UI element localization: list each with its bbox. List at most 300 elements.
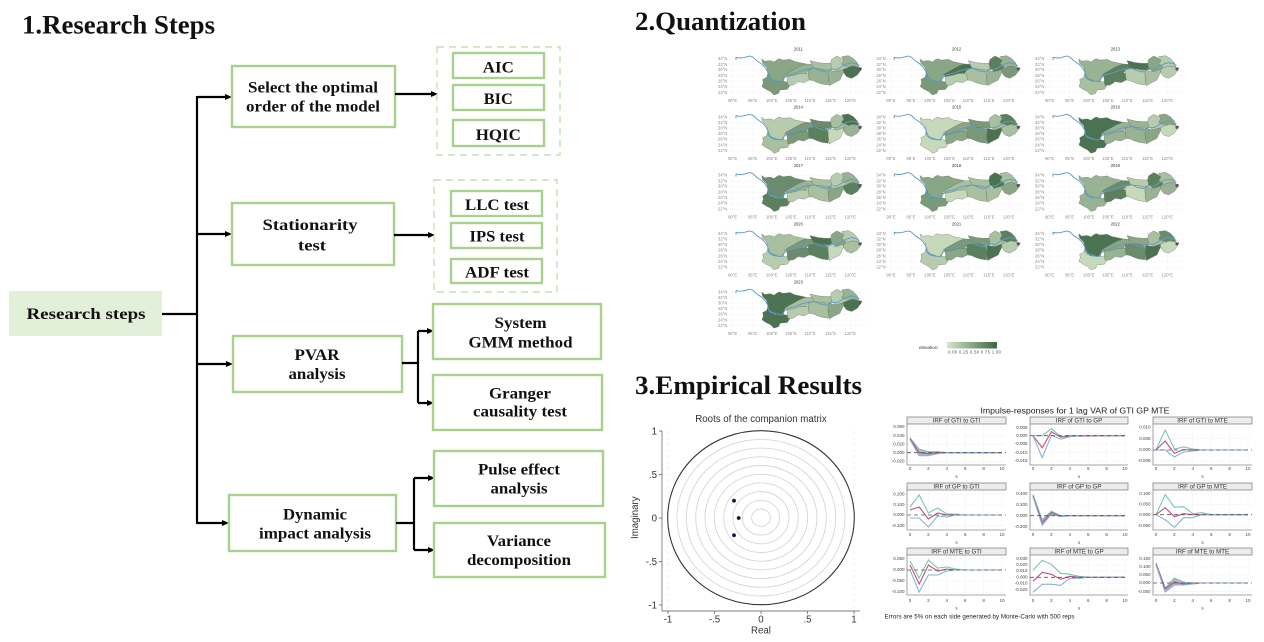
panel: IRF of GTI to MTE: 6 [1210,466,1213,471]
map panel: 2019: 115°E [1142,214,1153,219]
map panel: 2013: 115°E [1142,98,1153,103]
map panel: 2014: 30°N [718,125,727,130]
map panel: 2016: 22°N [1035,148,1044,153]
map panel: 2021: 34°N [876,231,886,236]
panel: IRF of GTI to GTI: 10 [999,466,1005,471]
panel: IRF of GP to MTE: IRF of GP to MTE [1178,483,1227,490]
panel: IRF of GP to MTE: 8 [1228,532,1231,537]
map panel: 2019: 30°N [1035,184,1044,189]
map panel: 2016: 28°N [1035,131,1044,136]
panel: IRF of MTE to GP: -0.010 [1015,581,1028,586]
map panel: 2022: 24°N [1035,259,1044,264]
map panel: 2022: 2022 [1111,221,1121,226]
box: System GMM method: GMM method [468,334,573,351]
panel: IRF of GP to MTE: 0.100 [1139,491,1151,496]
panel: IRF of MTE to GP: -0.020 [1015,587,1028,592]
map panel: 2019: 28°N [1035,189,1044,194]
map panel: 2012: 24°N [876,84,886,89]
map panel: 2015: 100°E [924,156,936,161]
map panel: 2014: 26°N [718,137,727,142]
panel: IRF of MTE to MTE: 0.050 [1139,572,1151,577]
map panel: 2012 [876,46,1025,103]
map panel: 2019: 110°E [1121,214,1133,219]
arrow to information criteria group [395,91,438,97]
panel: IRF of GP to MTE [1138,483,1252,545]
panel: IRF of GTI to GTI: -0.020 [892,459,905,464]
map panel: 2011: 100°E [766,98,778,103]
map panel: 2022: 110°E [1121,273,1133,278]
map panel: 2019: 24°N [1035,201,1044,206]
panel: IRF of MTE to GTI: 2 [927,598,930,603]
box: LLC test: LLC test [465,197,530,214]
panel: IRF of GP to GP: 2 [1050,532,1053,537]
map panel: 2013: 105°E [1102,98,1114,103]
panel: IRF of GP to GTI: 0.000 [893,512,905,517]
panel: IRF of MTE to GTI: 4 [946,598,949,603]
map panel: 2023: 26°N [718,312,727,317]
panel: IRF of GP to MTE: 4 [1192,532,1195,537]
arrow to dynamic impact box [197,520,229,526]
panel: IRF of GP to MTE: 6 [1210,532,1213,537]
map panel: 2015: 110°E [963,156,974,161]
map panel: 2018: 105°E [944,214,955,219]
panel: IRF of GP to GTI: 0.100 [893,502,905,507]
map panel: 2020: 24°N [718,259,727,264]
box: Granger causality test [433,375,602,430]
map panel: 2022: 100°E [1083,273,1095,278]
map panel: 2014: 110°E [804,156,816,161]
map panel: 2014: 100°E [766,156,778,161]
panel: IRF of GTI to MTE: 4 [1192,466,1195,471]
map panel: 2017: 28°N [718,189,727,194]
map panel: 2014: 22°N [718,148,727,153]
panel: IRF of GP to GTI: 0.200 [893,491,905,496]
chart: impulse-response functions [884,405,1252,621]
panel: IRF of GTI to GTI [892,417,1006,479]
panel: IRF of GP to GP: IRF of GP to GP [1057,483,1101,490]
map panel: 2016: 120°E [1162,156,1173,161]
panel: IRF of MTE to GTI: -0.100 [892,589,905,594]
y axis labels: .5 [649,470,657,481]
box: System GMM method [433,304,601,359]
panel: IRF of GTI to GTI: 6 [964,466,967,471]
map panel: 2011: 24°N [718,84,727,89]
map panel: 2015: 95°E [906,156,916,161]
panel: IRF of MTE to GTI: 8 [982,598,985,603]
panel: IRF of MTE to GTI: 0.000 [893,567,905,572]
panel: IRF of GP to GTI: 10 [999,532,1005,537]
map panel: 2012: 95°E [906,98,916,103]
panel: IRF of MTE to GP: 0.010 [1016,568,1028,573]
map panel: 2021: 90°E [886,273,896,278]
box: PVAR analysis: PVAR [294,347,340,364]
map panel: 2021: 110°E [963,273,974,278]
panel: IRF of GTI to GP: 4 [1069,466,1072,471]
map panel: 2017: 2017 [794,163,804,168]
panel: IRF of GTI to GTI: 8 [982,466,985,471]
panel: IRF of GTI to GP: 0 [1032,466,1035,471]
map panel: 2023 [718,280,867,336]
box: Pulse effect analysis [434,451,603,506]
axes [659,431,860,614]
panel: IRF of GTI to GP: 6 [1087,466,1090,471]
map panel: 2023: 34°N [718,289,727,294]
panel: IRF of GTI to GP [1015,417,1128,479]
box: dynamic impact analysis: Dynamic [283,506,347,523]
panel: IRF of MTE to MTE: 2 [1173,598,1176,603]
panel: IRF of MTE to MTE: 0.150 [1139,556,1151,561]
map panel: 2022: 30°N [1035,242,1044,247]
map panel: 2020: 120°E [845,273,856,278]
box: HQIC: HQIC [476,127,521,144]
map panel: 2015: 2015 [952,105,962,110]
panel: IRF of MTE to GP [1015,548,1128,610]
panel: IRF of MTE to GTI: 0.050 [893,556,905,561]
panel: IRF of MTE to GP: 4 [1069,598,1072,603]
flowchart [9,47,605,577]
map panel: 2022: 115°E [1142,273,1153,278]
map panel: 2021: 22°N [876,265,886,270]
map panel: 2022: 34°N [1035,231,1044,236]
map panel: 2015: 26°N [876,137,886,142]
panel: IRF of MTE to GP: IRF of MTE to GP [1054,548,1104,555]
box: Granger causality test: Granger [489,385,551,402]
map panel: 2015 [876,105,1025,161]
map panel: 2021: 30°N [876,242,886,247]
panel: IRF of MTE to MTE: 10 [1245,598,1251,603]
panel: IRF of MTE to GTI: 0 [909,598,912,603]
panel: IRF of GTI to MTE: 8 [1228,466,1231,471]
box: PVAR analysis: analysis [288,366,346,383]
panel: IRF of GTI to GTI: 0.060 [893,424,905,429]
map panel: 2017: 105°E [785,214,797,219]
map panel: 2012: 28°N [876,73,886,78]
map panel: 2018: 22°N [876,206,886,211]
map panel: 2012: 34°N [876,56,886,61]
panel: IRF of GTI to GP: -0.005 [1015,441,1028,446]
map panel: 2017: 24°N [718,201,727,206]
group: information criteria [437,47,560,155]
map panel: 2018: 115°E [983,214,995,219]
panel: IRF of GTI to GP: 8 [1105,466,1108,471]
panel: IRF of GTI to GP: s [1078,474,1081,479]
map panel: 2011: 22°N [718,90,727,95]
box: select optimal order: order of the model [246,99,381,116]
box: Variance decomposition: decomposition [467,552,571,569]
chart: roots of the companion matrix: Imaginary [630,496,641,539]
panel: IRF of GTI to MTE [1138,417,1252,479]
panel: IRF of GP to GP: 0 [1032,532,1035,537]
panel: IRF of GP to GTI: 2 [927,532,930,537]
map panel: 2013: 90°E [1045,98,1054,103]
concentric reference circles [677,439,845,596]
map panel: 2023: 2023 [794,280,804,285]
panel: IRF of MTE to GTI: 10 [999,598,1005,603]
map panel: 2016: 30°N [1035,125,1044,130]
panel: IRF of MTE to GP: 10 [1122,598,1128,603]
map panel: 2018: 95°E [906,214,916,219]
panel: IRF of GP to GTI [892,483,1006,545]
map panel: 2021: 120°E [1003,273,1015,278]
map panel: 2011: 30°N [718,67,727,72]
map panel: 2013: 30°N [1035,67,1044,72]
map panel: 2022: 120°E [1162,273,1173,278]
x axis labels: 1 [851,614,857,626]
map panel: 2014: 28°N [718,131,727,136]
map panel: 2020: 22°N [718,265,727,270]
map panel: 2023: 28°N [718,306,727,311]
chart title: Impulse-responses for 1 lag VAR of GTI GP MTE [981,405,1170,415]
arrow to unit root test group [394,232,435,238]
panel: IRF of MTE to MTE: 0.100 [1139,564,1151,569]
map panel: 2021: 95°E [906,273,916,278]
map panel: 2013 [1035,46,1184,103]
panel: IRF of MTE to GP: 0 [1032,598,1035,603]
map panel: 2013: 22°N [1035,90,1044,95]
panel: IRF of GP to MTE: 10 [1245,532,1251,537]
map panel: 2014: 32°N [718,120,727,125]
box: BIC: BIC [484,91,513,108]
box: Pulse effect analysis: analysis [490,480,548,497]
box: Granger causality test: causality test [473,404,568,421]
map panel: 2011 [718,46,867,103]
map panel: 2011: 90°E [728,98,737,103]
panel: IRF of GTI to MTE: 0.010 [1139,425,1151,430]
map panel: 2017: 95°E [748,214,757,219]
map panel: 2011: 110°E [804,98,816,103]
panel: IRF of MTE to GP: 0.030 [1016,556,1028,561]
map panel: 2021 [876,221,1025,278]
x axis labels: -.5 [709,614,720,626]
branch connector: dynamic impact to methods [396,475,435,553]
map panel: 2011: 120°E [845,98,856,103]
panel: IRF of GP to MTE: 0.000 [1139,512,1151,517]
branch connector: PVAR to methods [402,328,434,406]
box: AIC: AIC [483,59,514,76]
map legend: elevation: 0.00 0.25 0.50 0.75 1.00 [948,350,1002,354]
panel: IRF of GTI to MTE: 2 [1173,466,1176,471]
panel: IRF of GP to GP: 6 [1087,532,1090,537]
panel: IRF of GTI to GP: -0.010 [1015,450,1028,455]
root points [732,499,741,537]
map panel: 2011: 28°N [718,73,727,78]
map panel: 2011: 105°E [785,98,797,103]
panel: IRF of GP to GP: 0.000 [1016,513,1028,518]
map panel: 2015: 32°N [876,120,886,125]
map panel: 2016: 24°N [1035,142,1044,147]
map panel: 2018 [876,163,1025,219]
box: IPS test: IPS test [470,228,525,245]
map panel: 2015: 28°N [876,131,886,136]
map panel: 2022: 95°E [1065,273,1074,278]
map panel: 2023: 30°N [718,300,727,305]
panel: IRF of GP to GTI: 4 [946,532,949,537]
map panel: 2018: 26°N [876,195,886,200]
panel: IRF of MTE to GP: 2 [1050,598,1053,603]
panel: IRF of GP to GTI: -0.100 [892,523,905,528]
chart: roots of the companion matrix: Roots of the companion matrix [695,414,827,425]
y axis labels: 0 [652,514,658,524]
panel: IRF of GP to GTI: s [955,540,958,545]
map panel: 2012: 100°E [924,98,936,103]
map panel: 2018: 90°E [886,214,896,219]
map panel: 2013: 95°E [1065,98,1074,103]
trunk connector [162,96,197,524]
map panel: 2012: 32°N [876,62,886,67]
map panel: 2013: 2013 [1111,46,1121,51]
panel: IRF of MTE to MTE: IRF of MTE to MTE [1176,548,1229,555]
panel: IRF of GP to GP: 8 [1105,532,1108,537]
panel: IRF of MTE to GTI: s [955,605,958,610]
map panel: 2016: 115°E [1142,156,1153,161]
map panel: 2015: 105°E [944,156,955,161]
map panel: 2015: 34°N [876,114,886,119]
map panel: 2012: 30°N [876,67,886,72]
map panel: 2016: 95°E [1065,156,1074,161]
map legend: elevation: elevation: [919,345,939,350]
heading: 2.Quantization: 2.Quantization [635,7,807,36]
panel: IRF of GTI to GP: -0.015 [1015,458,1028,463]
map panel: 2012: 26°N [876,78,886,83]
map panel: 2020: 115°E [825,273,836,278]
map panel: 2019: 26°N [1035,195,1044,200]
panel: IRF of MTE to GP: 0.000 [1016,574,1028,579]
map panel: 2011: 2011 [794,46,803,51]
panel: IRF of GTI to MTE: 0 [1155,466,1158,471]
panel: IRF of GTI to MTE: -0.005 [1138,458,1151,463]
map panel: 2017: 34°N [718,173,727,178]
map panel: 2016: 32°N [1035,120,1044,125]
panel: IRF of GP to GP [1015,483,1128,545]
panel: IRF of MTE to GP: 8 [1105,598,1108,603]
panel: IRF of GP to GTI: IRF of GP to GTI [933,483,980,490]
map panel: 2014 [718,105,867,161]
panel: IRF of GP to MTE: 2 [1173,532,1176,537]
map panel: 2022: 22°N [1035,265,1044,270]
panel: IRF of MTE to MTE: 8 [1228,598,1231,603]
map panel: 2012: 115°E [983,98,995,103]
chart: roots of the companion matrix: Real [751,626,771,636]
map panel: 2023: 115°E [825,331,836,336]
map panel: 2015: 22°N [876,148,886,153]
map panel: 2011: 115°E [825,98,836,103]
box: dynamic impact analysis [229,495,396,551]
x axis labels [664,614,857,626]
y axis labels: -.5 [646,557,657,568]
panel: IRF of MTE to GP: s [1078,605,1081,610]
map panel: 2020: 110°E [804,273,816,278]
panel: IRF of GTI to GTI: 0.000 [893,450,905,455]
panel: IRF of GP to MTE: 0 [1155,532,1158,537]
panel: IRF of GTI to MTE: IRF of GTI to MTE [1177,417,1228,424]
box: Variance decomposition: Variance [487,533,551,550]
map panel: 2023: 95°E [748,331,757,336]
panel: IRF of MTE to MTE: 6 [1210,598,1213,603]
box: select optimal order [232,66,395,127]
panel: IRF of MTE to MTE [1138,548,1252,610]
map panel: 2020: 105°E [785,273,797,278]
x axis labels: -1 [664,614,672,626]
panel: IRF of GP to GTI: 0 [909,532,912,537]
map panel: 2020: 30°N [718,242,727,247]
box: Pulse effect analysis: Pulse effect [478,461,561,478]
map panel: 2013: 34°N [1035,56,1044,61]
map panel: 2019 [1035,163,1184,219]
map panel: 2018: 32°N [876,178,886,183]
map panel: 2016: 34°N [1035,114,1044,119]
chart: roots of the companion matrix [630,414,860,636]
panel: IRF of GTI to GTI: 0.040 [893,433,905,438]
panel: IRF of GP to GTI: 6 [964,532,967,537]
map panel: 2021: 26°N [876,253,886,258]
map panel: 2012: 2012 [952,46,962,51]
x axis labels: .5 [803,614,812,626]
panel: IRF of MTE to GTI: 6 [964,598,967,603]
panel: IRF of GTI to GTI: 0.020 [893,442,905,447]
map panel: 2014: 115°E [825,156,836,161]
panel: IRF of MTE to MTE: -0.050 [1138,589,1151,594]
map panel: 2021: 105°E [944,273,955,278]
map panel: 2023: 22°N [718,323,727,328]
map panel: 2023: 24°N [718,317,727,322]
map panel: 2012: 105°E [944,98,955,103]
map panel: 2012: 90°E [886,98,896,103]
map panel: 2018: 100°E [924,214,936,219]
map panel: 2012: 120°E [1003,98,1015,103]
panel: IRF of MTE to MTE: 4 [1192,598,1195,603]
map panel: 2016: 110°E [1121,156,1133,161]
map panel: 2021: 2021 [952,221,962,226]
map panel: 2020: 32°N [718,237,727,242]
map panel: 2021: 28°N [876,248,886,253]
map panel: 2021: 100°E [924,273,936,278]
box: stationarity test [232,203,394,265]
arrow to stationarity box [197,231,232,237]
map panel: 2018: 110°E [963,214,974,219]
panel: IRF of MTE to GP: 6 [1087,598,1090,603]
panel: IRF of GTI to GTI: 4 [946,466,949,471]
map panel: 2016: 105°E [1102,156,1114,161]
panel: IRF of GTI to GTI: 2 [927,466,930,471]
map panel: 2020: 34°N [718,231,727,236]
map panel: 2023: 90°E [728,331,737,336]
panel: IRF of GP to MTE: 0.050 [1139,502,1151,507]
arrow to optimal order box [197,94,232,100]
panel: IRF of MTE to MTE: 0.000 [1139,580,1151,585]
map panel: 2015: 24°N [876,142,886,147]
map panel: 2013: 110°E [1121,98,1133,103]
x axis labels: 0 [758,614,764,626]
map panel: 2017 [718,163,867,219]
map panel: 2014: 105°E [785,156,797,161]
map panel: 2020 [718,221,867,278]
y axis labels [646,426,658,612]
panel: IRF of GP to MTE: -0.050 [1138,523,1151,528]
map panel: 2019: 34°N [1035,173,1044,178]
map panel: 2017: 110°E [804,214,816,219]
panel: IRF of MTE to MTE: 0 [1155,598,1158,603]
map panel: 2022: 105°E [1102,273,1114,278]
map panel: 2018: 30°N [876,184,886,189]
panel: IRF of GTI to GTI: 0 [909,466,912,471]
panel: IRF of MTE to MTE: s [1201,605,1204,610]
panel: IRF of GP to GP: 0.200 [1016,502,1028,507]
map panel: 2019: 95°E [1065,214,1074,219]
panel: IRF of GTI to MTE: 0.000 [1139,447,1151,452]
map panel: 2014: 90°E [728,156,737,161]
box: dynamic impact analysis: impact analysis [259,525,371,542]
map panel: 2020: 2020 [794,221,804,226]
